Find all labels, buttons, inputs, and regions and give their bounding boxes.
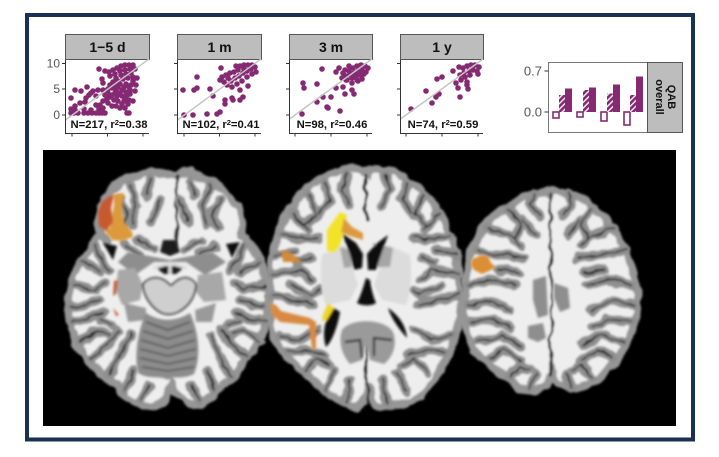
stat: 3 m: N=98, r xyxy=(297,119,335,131)
lateral notches xyxy=(103,242,240,260)
cerebellum folia xyxy=(140,322,196,371)
stat: 1 m: N=102, r xyxy=(182,119,227,131)
inner occipital gray xyxy=(340,321,395,364)
side strip: QAB overall xyxy=(648,62,682,132)
y labels: 0 xyxy=(53,108,60,122)
stat: 1 y: N=74, r xyxy=(408,119,446,131)
stat: 1-5 d: 2 xyxy=(115,118,119,127)
cortex and white matter xyxy=(463,191,637,390)
dots: 3 m xyxy=(302,65,368,114)
activation: posterior xyxy=(270,303,316,349)
activation: frontal red xyxy=(98,194,114,231)
bar chart: QAB overall xyxy=(524,62,682,132)
dots: 1 y xyxy=(411,65,479,109)
central recess xyxy=(154,240,186,274)
deep structures xyxy=(270,212,411,364)
midbrain xyxy=(143,278,196,314)
axes: 1 y xyxy=(397,60,483,136)
plot border xyxy=(548,62,648,132)
ventricles xyxy=(324,233,407,347)
stat: 1 y: 2 xyxy=(446,118,450,127)
y labels: 10 xyxy=(47,56,60,70)
stat: 1-5 d: N=217, r xyxy=(70,119,115,131)
caudate xyxy=(340,243,393,268)
diagonal: 1-5 d xyxy=(66,59,149,120)
diagonal: 1 m xyxy=(178,59,261,120)
inner occipital folds xyxy=(345,338,392,358)
optic chiasm xyxy=(153,263,187,274)
header: 1 y: 1 y xyxy=(432,39,452,55)
diagonal: 3 m xyxy=(290,59,372,119)
dots: 1-5 d xyxy=(71,65,137,113)
cerebellum xyxy=(136,313,198,380)
deep structures xyxy=(471,255,570,342)
scatter panel: 1 y xyxy=(397,34,484,136)
axis ticks and labels: 0.0 xyxy=(524,104,542,120)
header: 1-5 d: 1−5 d xyxy=(89,39,126,55)
y labels xyxy=(47,56,60,122)
axes: 1 m xyxy=(174,60,261,136)
stat: 3 m: 2 xyxy=(335,118,339,127)
header: 1 m: 1 m xyxy=(207,39,232,55)
scatter panel: 1-5 d xyxy=(47,34,150,136)
activation: insula xyxy=(113,280,119,316)
side strip: QAB overall: overall xyxy=(653,79,665,115)
axes: 3 m xyxy=(286,60,372,136)
medial gray xyxy=(528,276,570,342)
stat: 3 m: =0.46 xyxy=(339,119,367,131)
brain slice: ventral xyxy=(68,172,270,407)
black background xyxy=(43,150,676,426)
axes: 1-5 d xyxy=(62,60,149,136)
scatter panel: 1 m xyxy=(174,34,262,136)
stat: 1 m: 2 xyxy=(227,118,231,127)
activation: frontal yellow xyxy=(327,212,347,253)
y labels: 5 xyxy=(53,82,60,96)
activation: frontal xyxy=(104,193,133,241)
stat: 1 m: =0.41 xyxy=(231,119,260,131)
gray band between lobes xyxy=(118,252,226,275)
axis ticks and labels xyxy=(524,64,548,120)
header: 3 m: 3 m xyxy=(319,39,343,55)
stat: 1-5 d: =0.38 xyxy=(119,119,148,131)
diagonal: 1 y xyxy=(400,59,483,119)
insula xyxy=(116,268,226,305)
activation: frontal orange xyxy=(341,218,363,240)
dots: 1 m xyxy=(183,65,256,115)
axis ticks and labels: 0.7 xyxy=(524,64,542,78)
scatter panel: 3 m xyxy=(286,34,372,136)
activation: precentral xyxy=(471,255,496,274)
brain slice: mid axial xyxy=(270,169,461,408)
side strip: QAB overall: QAB xyxy=(665,85,677,109)
basal ganglia xyxy=(321,245,411,305)
activation: mid-lateral xyxy=(281,250,301,263)
brain slice: superior xyxy=(463,191,637,390)
brain image panel xyxy=(43,150,676,426)
deep structures xyxy=(98,193,240,380)
cortex and white matter xyxy=(270,169,461,408)
cortex and white matter xyxy=(68,172,270,407)
activation: posterior yellow xyxy=(322,303,334,321)
lower temporal gray xyxy=(124,303,216,322)
stat: 1 y: =0.59 xyxy=(450,119,478,131)
bars xyxy=(553,76,643,125)
